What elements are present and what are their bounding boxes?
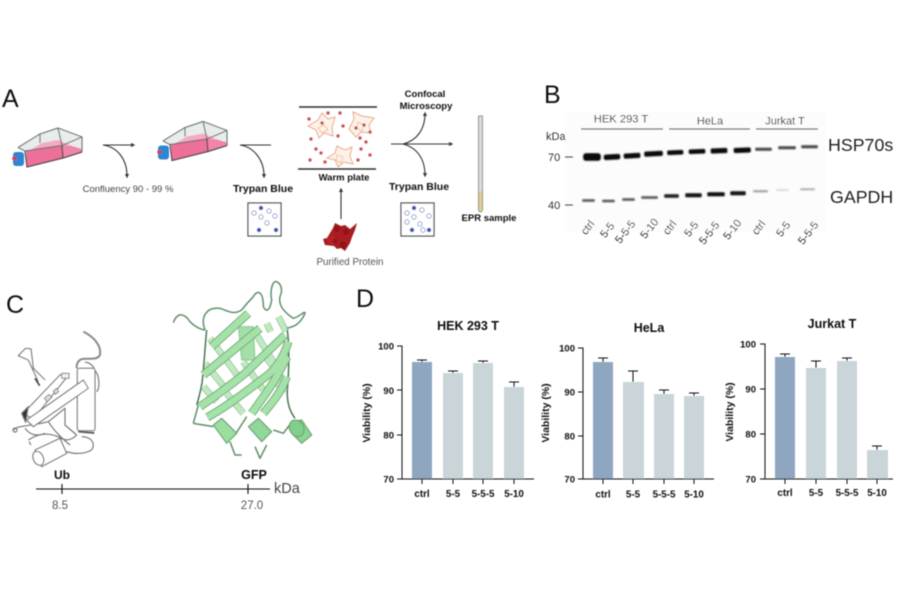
- GFP front strands: [200, 313, 288, 417]
- lane labels: 5-5: [598, 220, 617, 240]
- arrow: to trypan blue: [240, 145, 271, 177]
- icon: flask 2: [157, 122, 227, 160]
- chart: Jurkat T: 5-5-5: [836, 488, 859, 499]
- chart: HEK 293 T: HEK 293 T: [437, 319, 499, 333]
- structure: ubiquitin: [13, 332, 100, 467]
- arrows: branching outcomes: [391, 113, 452, 176]
- mass scale: kDa: [274, 481, 301, 497]
- heading: trypan blue 1: Trypan Blue: [233, 183, 293, 195]
- chart: HeLa: Viability (%): [540, 383, 552, 443]
- label D: D: [356, 285, 374, 313]
- chart: Jurkat T: 80: [745, 430, 756, 440]
- GFP loops: [173, 282, 305, 458]
- icon: cell count box 1: [248, 203, 281, 236]
- lane labels: 5-5-5: [796, 219, 821, 247]
- chart: HeLa: HeLa: [634, 321, 665, 335]
- chart: HEK 293 T: 5-5-5: [472, 489, 495, 500]
- GAPDH bands: [582, 188, 815, 202]
- text: warm plate: Warm plate: [319, 172, 369, 184]
- panel: D viability charts: [356, 285, 893, 500]
- chart: HeLa: 5-5-5: [653, 490, 676, 500]
- chart: Jurkat T: 70: [745, 474, 756, 486]
- lane labels: ctrl: [579, 218, 597, 237]
- size markers: kDa: [546, 131, 566, 143]
- heading: trypan blue 2: Trypan Blue: [389, 181, 449, 193]
- GFP helices: [213, 417, 312, 443]
- band labels: GAPDH: [830, 187, 893, 207]
- chart: HEK 293 T: 80: [383, 430, 394, 442]
- icon: cell count box 2: [401, 203, 434, 236]
- mass scale: 8.5: [52, 500, 68, 512]
- chart: Jurkat T: 90: [745, 384, 756, 396]
- panel: B western blot: [544, 81, 893, 247]
- chart: HeLa: 5-10: [684, 490, 704, 500]
- chart: HEK 293 T: [361, 319, 534, 500]
- text: purified protein: Purified Protein: [317, 257, 383, 268]
- chart: HEK 293 T: 5-5: [446, 489, 461, 500]
- chart: HeLa: ctrl: [595, 490, 611, 500]
- lane labels: 5-5: [682, 219, 701, 239]
- GFP back strands and helix: [203, 317, 286, 413]
- lane labels: ctrl: [750, 218, 768, 237]
- chart: HEK 293 T: Viability (%): [361, 383, 373, 443]
- lane group headers: HEK 293 T: [594, 114, 648, 126]
- chart: HEK 293 T: ctrl: [414, 489, 430, 500]
- chart: Jurkat T: 100: [740, 340, 756, 350]
- chart: HeLa: 100: [559, 344, 575, 354]
- band labels: HSP70s: [828, 135, 893, 155]
- mass scale: Ub: [54, 468, 70, 482]
- chart: HEK 293 T: 5-10: [504, 489, 524, 500]
- size markers: [546, 131, 573, 212]
- icon: flask 1: [12, 128, 82, 167]
- chart: HEK 293 T: 90: [383, 386, 394, 397]
- chart: HeLa: 5-5: [626, 490, 641, 500]
- icon: EPR tube: [478, 116, 482, 212]
- chart: HeLa: [540, 321, 714, 500]
- chart: Jurkat T: Viability (%): [724, 382, 736, 442]
- chart: HeLa: 90: [564, 388, 575, 398]
- chart: Jurkat T: 5-5: [809, 488, 824, 499]
- lane labels: 5-5-5: [613, 218, 638, 246]
- text: EPR sample: EPR sample: [462, 213, 516, 224]
- chart: Jurkat T: 5-10: [867, 488, 887, 499]
- chart: Jurkat T: ctrl: [777, 488, 793, 499]
- lane labels: 5-10: [721, 217, 744, 242]
- label B: B: [544, 81, 561, 109]
- lane labels: 5-10: [638, 216, 661, 241]
- chart: HEK 293 T: 70: [383, 474, 394, 486]
- panel: C protein structures: [6, 282, 312, 512]
- lane labels: ctrl: [661, 218, 679, 237]
- chart: HeLa: 80: [564, 432, 575, 442]
- blot background: [565, 112, 825, 232]
- chart: HEK 293 T: 100: [378, 342, 394, 352]
- lane labels: [579, 216, 821, 247]
- structure: GFP: [173, 282, 312, 458]
- mass scale: 27.0: [241, 500, 263, 512]
- panel: A workflow: [2, 85, 516, 268]
- arrow: confluency step: [103, 144, 134, 177]
- size markers: 40: [548, 200, 560, 212]
- mass scale: [36, 468, 301, 512]
- chart: Jurkat T: [724, 317, 893, 499]
- label A: A: [2, 85, 19, 113]
- heading: confocal microscopy: Confocal: [405, 89, 445, 100]
- mass scale: GFP: [241, 468, 267, 482]
- text: confluency: Confluency 90 - 99 %: [83, 184, 174, 195]
- heading: confocal microscopy: Microscopy: [400, 101, 453, 112]
- band labels: [828, 135, 893, 207]
- arrow: protein to plate: [340, 189, 342, 219]
- HSP70 bands: [583, 145, 818, 161]
- size markers: 70: [548, 152, 560, 164]
- label C: C: [6, 291, 24, 319]
- lane group headers: Jurkat T: [765, 116, 805, 128]
- lane group headers: [581, 114, 818, 129]
- lane group headers: HeLa: [697, 116, 724, 128]
- icon: purified protein: [323, 223, 357, 251]
- warm plate with cells: [298, 107, 377, 169]
- chart: Jurkat T: Jurkat T: [808, 317, 857, 331]
- chart: HeLa: 70: [564, 474, 575, 486]
- lane labels: 5-5: [774, 219, 793, 239]
- lane labels: 5-5-5: [697, 219, 722, 247]
